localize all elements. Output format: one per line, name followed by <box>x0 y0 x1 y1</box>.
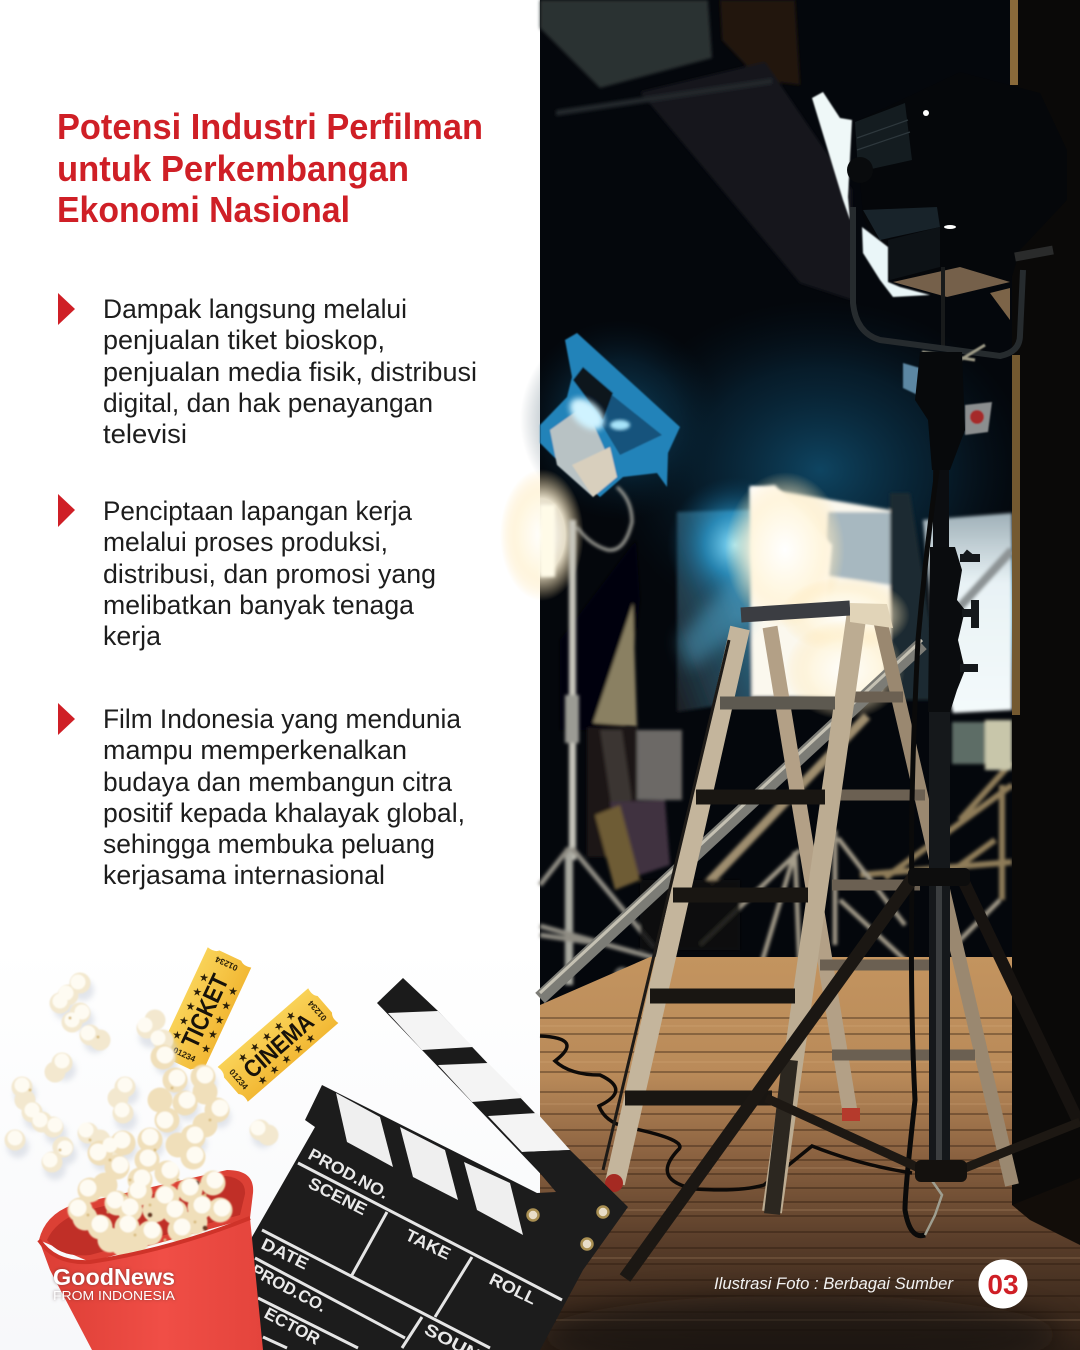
bullet 2: melalui proses produksi, <box>103 527 388 557</box>
bullet 2: melibatkan banyak tenaga <box>103 590 415 620</box>
bullet 3: mampu memperkenalkan <box>103 735 407 765</box>
title: untuk Perkembangan <box>57 148 409 189</box>
ticket: TICKET: 01234 <box>171 1045 197 1064</box>
bullet 2 <box>58 494 436 651</box>
wooden floor <box>540 957 1080 1350</box>
background panels <box>677 486 1012 713</box>
ticket: CINEMA: ★★★★★ <box>235 1004 303 1066</box>
bullet 3 <box>58 703 465 890</box>
bullet 3: budaya dan membangun citra <box>103 767 453 797</box>
bullet 3: positif kepada khalayak global, <box>103 798 465 828</box>
ticket: TICKET: ★★★★★ <box>169 965 215 1043</box>
bullet 1: penjualan tiket bioskop, <box>103 325 385 355</box>
curtain and tan wedge <box>560 540 640 730</box>
popcorn bucket back <box>39 1170 253 1262</box>
page number badge: 03 <box>987 1269 1019 1300</box>
bullet 2: kerja <box>103 621 162 651</box>
bullet 1: televisi <box>103 419 187 449</box>
popcorn bucket front <box>39 1218 263 1350</box>
ticket: CINEMA: 01234 <box>306 998 329 1023</box>
soft shadow under popcorn <box>18 990 263 1169</box>
ticket: TICKET <box>158 945 252 1075</box>
bullet 3: Film Indonesia yang mendunia <box>103 704 462 734</box>
board labels <box>248 1145 540 1350</box>
right wall <box>1010 0 1080 1245</box>
panel: white left background <box>0 0 540 1350</box>
bullet 3: sehingga membuka peluang <box>103 829 435 859</box>
ceiling beams <box>540 0 852 300</box>
bullet 2: distribusi, dan promosi yang <box>103 559 436 589</box>
clapperboard <box>248 978 628 1350</box>
logo: FROM INDONESIA <box>53 1289 176 1303</box>
blue lamp on left <box>540 333 680 497</box>
bright lamp glow <box>500 469 910 720</box>
ticket: CINEMA <box>216 987 340 1103</box>
board labels: PROD.NO. <box>305 1145 392 1203</box>
diagonal pipe <box>540 644 922 998</box>
caption: Ilustrasi Foto : Berbagai Sumber <box>714 1275 955 1293</box>
popcorn <box>15 982 268 1244</box>
board labels: PROD.CO. <box>248 1261 329 1316</box>
board labels: SCENE <box>305 1174 370 1219</box>
bullet 3: kerjasama internasional <box>103 860 385 890</box>
light stand <box>625 352 1080 1278</box>
board grid lines <box>255 1163 562 1348</box>
board labels: DATE <box>258 1235 312 1274</box>
floor cables <box>540 1036 912 1190</box>
ticket: TICKET: TICKET <box>176 970 235 1053</box>
bullet 1: Dampak langsung melalui <box>103 294 407 324</box>
ticket: CINEMA: ★★★★★ <box>255 1027 323 1088</box>
board body <box>250 1085 628 1350</box>
logo <box>53 1264 176 1303</box>
background equipment <box>540 487 1012 985</box>
eyelets <box>528 1206 608 1250</box>
ladder <box>603 603 1012 1214</box>
panel: film set photo <box>500 0 1080 1350</box>
floor shadow <box>540 1295 1060 1350</box>
board labels: ROLL <box>486 1270 540 1309</box>
back small lamp <box>903 345 992 435</box>
title <box>57 106 483 230</box>
board labels: ECTOR <box>261 1304 323 1349</box>
bullet 2: Penciptaan lapangan kerja <box>103 496 413 526</box>
ticket: TICKET: ★★★★★ <box>198 979 244 1056</box>
bullet 1: digital, dan hak penayangan <box>103 388 433 418</box>
board labels: TAKE <box>402 1226 454 1264</box>
popcorn kernels <box>15 982 268 1244</box>
blue haze <box>520 300 1080 700</box>
large studio lamp <box>812 72 1067 356</box>
ticket: CINEMA: CINEMA <box>238 1008 320 1084</box>
title: Ekonomi Nasional <box>57 189 350 230</box>
page number badge <box>978 1260 1028 1308</box>
ticket: CINEMA: 01234 <box>227 1067 250 1092</box>
title: Potensi Industri Perfilman <box>57 106 483 147</box>
ticket: TICKET: 01234 <box>213 954 239 973</box>
bullet 1 <box>58 293 477 449</box>
upper clap stick <box>377 978 570 1192</box>
bullet 1: penjualan media fisik, distribusi <box>103 357 477 387</box>
logo: GoodNews <box>53 1264 175 1290</box>
